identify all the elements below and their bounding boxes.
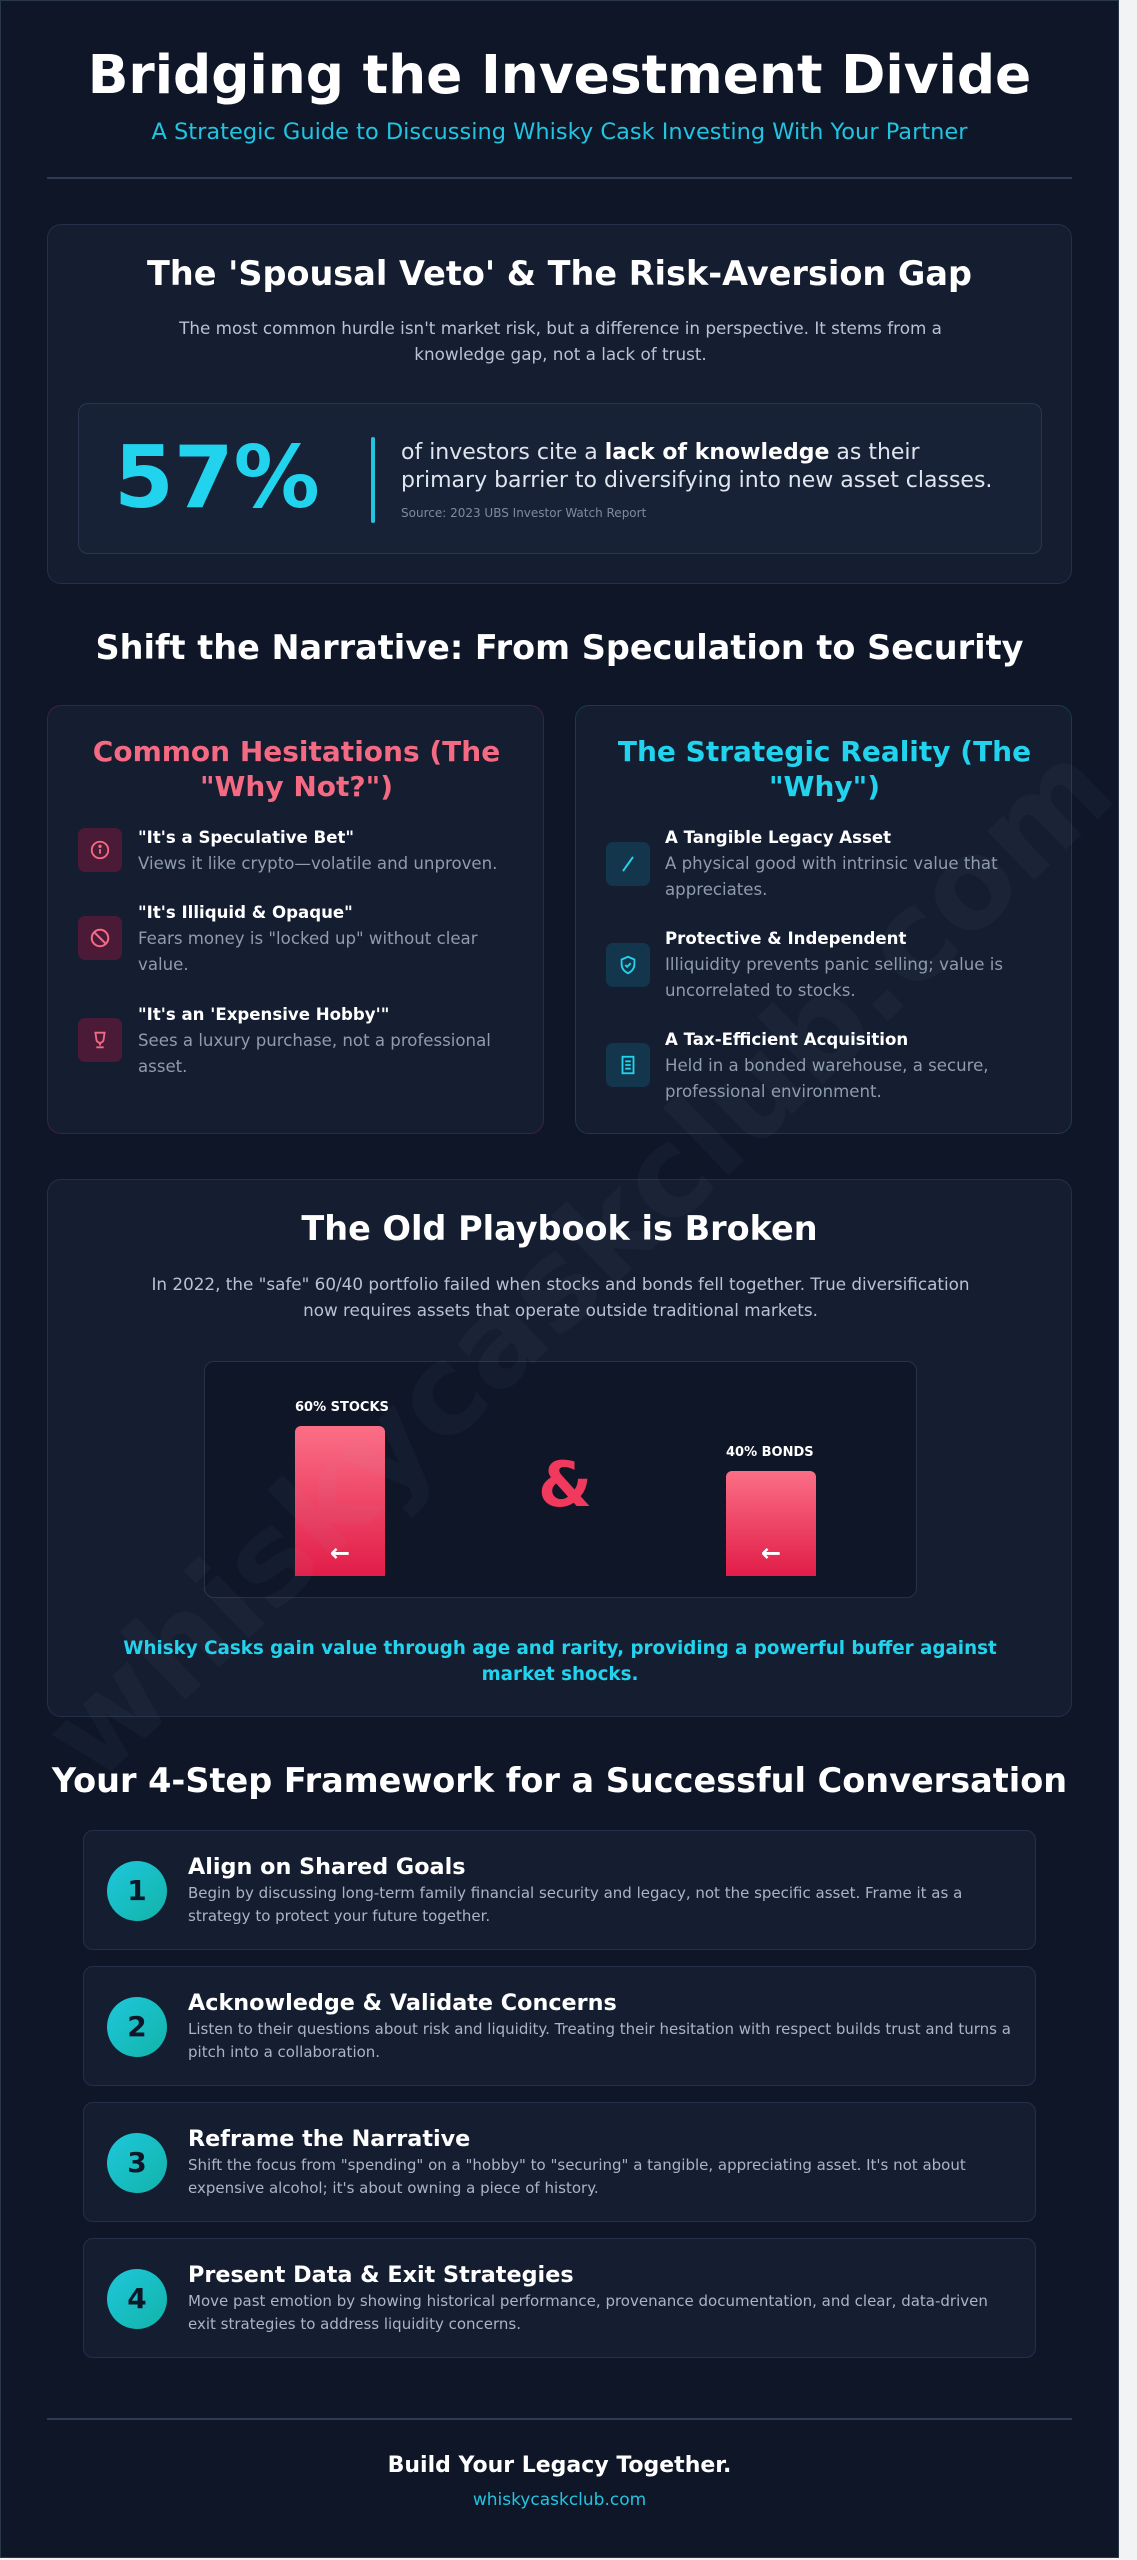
subtitle: A Strategic Guide to Discussing Whisky Cask Investing With Your Partner: [151, 119, 968, 145]
section heading: shift the narrative: Shift the Narrative: From Speculation to Security: [96, 628, 1023, 667]
item: expensive hobby: Sees a luxury purchase, not a professional asset.: [138, 1031, 491, 1076]
footer tagline: Build Your Legacy Together.: [388, 2453, 731, 2478]
stat text: of investors cite a lack of knowledge as their: [401, 440, 920, 465]
step 4: [83, 2238, 1036, 2358]
icon: ban: [78, 916, 122, 960]
stat text: [401, 440, 992, 493]
step 3: Shift the focus from "spending" on a "hobby" to "securing" a tangible, appreciating asset. It's not about expensive alcohol; it's about owning a piece of history.: [188, 2156, 966, 2197]
bar: bonds: ←: [761, 1539, 781, 1567]
step 2: Acknowledge & Validate Concerns: [188, 1990, 617, 2016]
bar: stocks: ←: [330, 1539, 350, 1567]
step 3: 3: [127, 2146, 147, 2179]
step 3: [83, 2102, 1036, 2222]
intro text: The most common hurdle isn't market risk, but a difference in perspective. It stems from a knowledge gap, not a lack of trust.: [179, 318, 942, 364]
ampersand: &: [538, 1448, 592, 1521]
step 2: 2: [127, 2010, 147, 2043]
item: tangible: [606, 828, 998, 899]
step 4: 4: [127, 2282, 147, 2315]
item: expensive hobby: "It's an 'Expensive Hobby'": [138, 1005, 389, 1024]
watermark: whiskycaskclub.com: [16, 715, 1137, 1808]
icon: shield: [606, 943, 650, 987]
item: tax efficient: A Tax-Efficient Acquisition: [665, 1030, 908, 1049]
item: speculative bet: Views it like crypto—volatile and unproven.: [138, 854, 497, 873]
step 1: 1: [127, 1874, 147, 1907]
item: tangible: A Tangible Legacy Asset: [665, 828, 891, 847]
label: stocks: 60% STOCKS: [295, 1400, 389, 1415]
panel: spousal veto: [47, 224, 1072, 584]
icon: glass: [78, 1018, 122, 1062]
item: expensive hobby: [78, 1005, 491, 1076]
panel: common hesitations: [47, 705, 544, 1134]
step 4: Move past emotion by showing historical performance, provenance documentation, and clear, data-driven exit strategies to address liquidity concerns.: [188, 2292, 988, 2333]
item: illiquid: Fears money is "locked up" without clear value.: [138, 929, 478, 974]
icon: pen: [606, 842, 650, 886]
heading: The Strategic Reality (The "Why"): [618, 735, 1031, 803]
step 1: Align on Shared Goals: [188, 1854, 466, 1880]
step 1: [83, 1830, 1036, 1950]
item: tax efficient: Held in a bonded warehouse, a secure, professional environment.: [665, 1056, 989, 1101]
label: bonds: 40% BONDS: [726, 1445, 814, 1460]
item: protective: Protective & Independent: [665, 929, 906, 948]
heading: Common Hesitations (The "Why Not?"): [93, 735, 500, 803]
item: speculative bet: "It's a Speculative Bet": [138, 828, 354, 847]
callout: Whisky Casks gain value through age and rarity, providing a powerful buffer against market shocks.: [123, 1638, 997, 1685]
section heading: framework: Your 4-Step Framework for a Successful Conversation: [52, 1761, 1067, 1800]
stat text: primary barrier to diversifying into new asset classes.: [401, 468, 992, 493]
item: tax efficient: [606, 1030, 989, 1101]
step 3: Reframe the Narrative: [188, 2126, 470, 2152]
heading: The Old Playbook is Broken: [301, 1209, 818, 1248]
item: protective: Illiquidity prevents panic selling; value is uncorrelated to stocks.: [665, 955, 1003, 1000]
footer url: whiskycaskclub.com: [473, 2490, 646, 2510]
panel: strategic reality: [575, 705, 1072, 1134]
icon: document: [606, 1043, 650, 1087]
icon: info: [78, 828, 122, 872]
bar: stocks: [295, 1426, 385, 1576]
item: protective: [606, 929, 1003, 1000]
item: speculative bet: [78, 828, 497, 873]
step 1: Begin by discussing long-term family financial security and legacy, not the specific asset. Frame it as a strategy to protect your future together.: [188, 1884, 962, 1925]
panel: old playbook: [47, 1179, 1072, 1717]
bar chart: [204, 1361, 917, 1598]
stat box: [78, 403, 1042, 554]
step 4: Present Data & Exit Strategies: [188, 2262, 574, 2288]
intro text: In 2022, the "safe" 60/40 portfolio failed when stocks and bonds fell together. True diversification now requires assets that operate outside traditional markets.: [151, 1274, 970, 1320]
item: illiquid: "It's Illiquid & Opaque": [138, 903, 353, 922]
bar: bonds: [726, 1471, 816, 1576]
item: tangible: A physical good with intrinsic value that appreciates.: [665, 854, 998, 899]
stat number: 57%: [114, 428, 320, 528]
heading: The 'Spousal Veto' & The Risk-Aversion Gap: [147, 254, 972, 293]
step 2: Listen to their questions about risk and liquidity. Treating their hesitation with respect builds trust and turns a pitch into a collaboration.: [188, 2020, 1011, 2061]
item: illiquid: [78, 903, 478, 974]
step 2: [83, 1966, 1036, 2086]
source: Source: 2023 UBS Investor Watch Report: [401, 506, 646, 520]
title: Bridging the Investment Divide: [88, 43, 1031, 106]
